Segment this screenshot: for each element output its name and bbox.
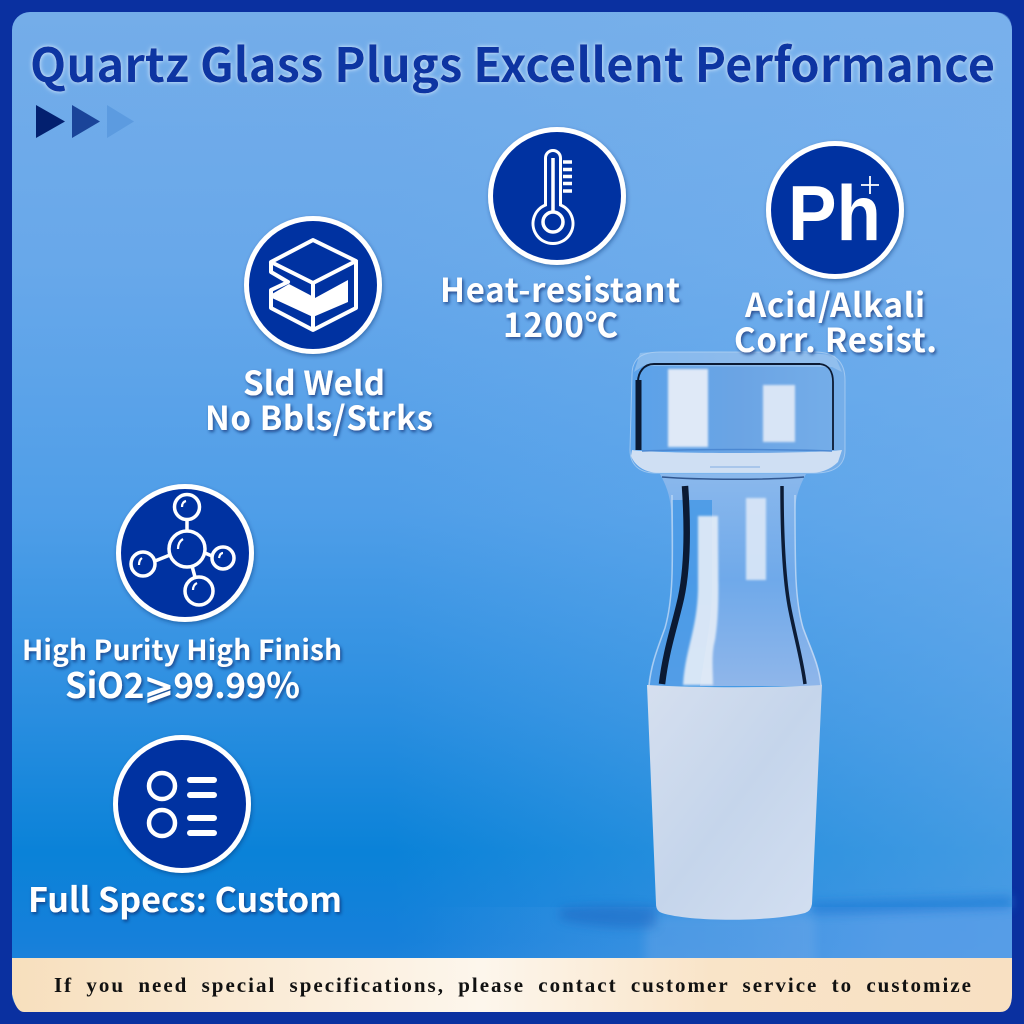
bottom banner [12,958,1012,1012]
feature: high purity [22,486,342,709]
title arrows [36,105,134,138]
label: high purity: High Purity High Finish [22,629,342,669]
label: acid alkali: Corr. Resist. [734,314,937,362]
icon: thermometer [490,130,624,262]
icon: Ph [768,144,902,276]
feature: full specs [28,738,342,922]
frosted joint [647,685,822,920]
label: full specs: Full Specs: Custom [28,873,342,922]
label: heat resistant [440,264,680,347]
icon: list [116,738,248,870]
feature: heat resistant [440,130,680,347]
icon: molecule [118,486,252,620]
icon: cube [246,218,380,352]
icon: Ph: Ph [788,169,881,257]
label: heat resistant: 1200℃ [503,299,618,347]
quartz glass plug [630,352,845,920]
label: high purity [22,629,342,709]
label: heat resistant: Heat-resistant [440,264,680,312]
label: solid weld [205,357,433,440]
label: high purity: SiO2⩾99.99% [65,658,300,709]
banner text: If you need special specifications, please contact customer service to customize [54,973,971,997]
label: solid weld: Sld Weld [243,357,385,405]
feature: acid alkali [734,144,937,362]
label: acid alkali [734,279,937,362]
label: solid weld: No Bbls/Strks [205,392,433,440]
label: acid alkali: Acid/Alkali [744,279,925,327]
feature: solid weld [205,218,433,440]
title: Quartz Glass Plugs Excellent Performance [30,27,995,96]
plug cap [630,352,845,479]
plug neck [648,474,822,686]
